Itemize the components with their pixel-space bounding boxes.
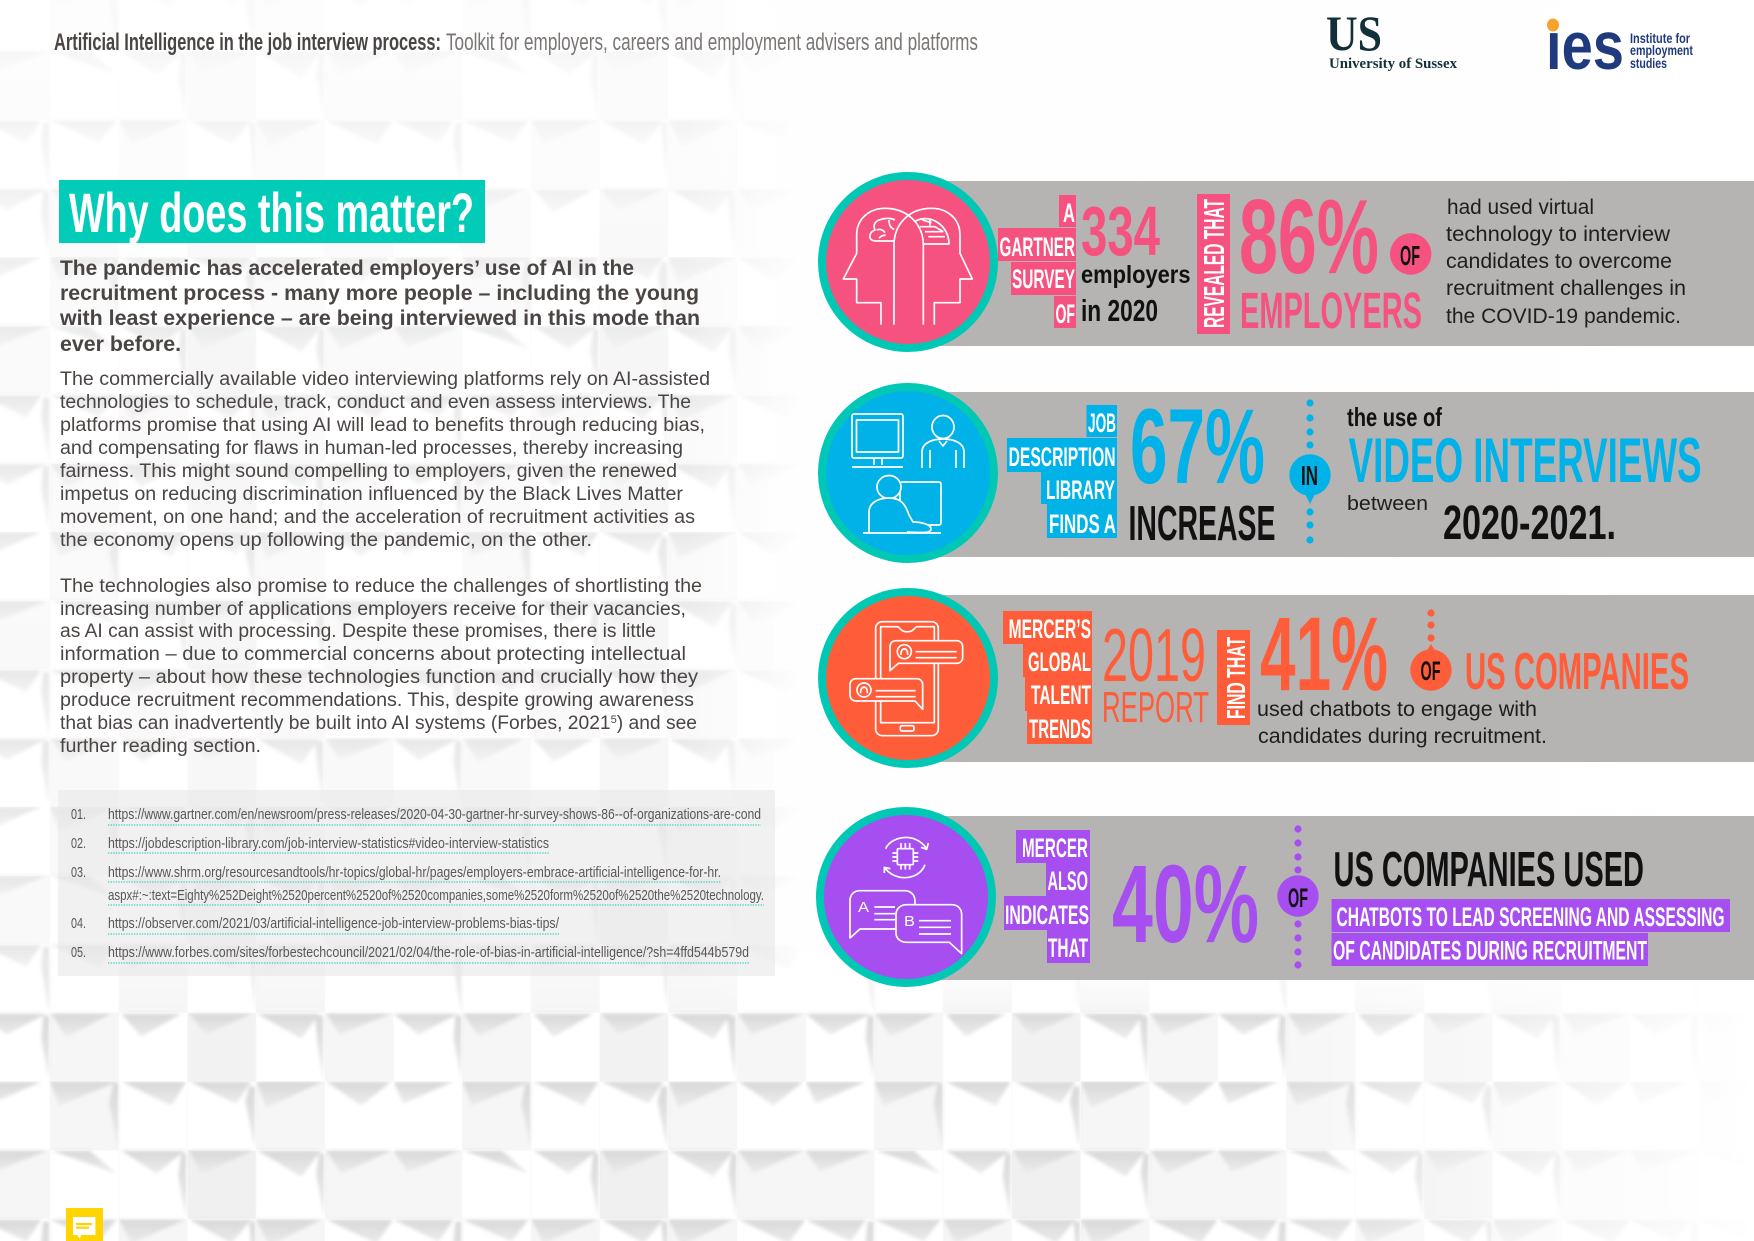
stat: 2019 report: REPORT (1102, 683, 1209, 732)
logo: Institute for Employment Studies: ies (1546, 8, 1624, 84)
text: use of video interviews (1347, 402, 1702, 550)
label boxes: A Gartner survey of: OF (1056, 299, 1075, 329)
body paragraph 1: fairness. This might sound compelling to employers, given the renewed (60, 461, 677, 482)
stat: 40%: 40% (1112, 843, 1259, 966)
text: used chatbots: used chatbots to engage with (1257, 698, 1537, 721)
panel: Mercer screening stat (820, 811, 1754, 983)
text: US companies used chatbots (1332, 843, 1730, 966)
stat: 334 employers in 2020: employers (1081, 261, 1190, 289)
dotted divider with badge: of: OF (1288, 883, 1308, 913)
icon: two heads, brain and circuit (822, 176, 994, 348)
stat: 2019 report (1102, 613, 1209, 732)
icon: video interview, monitors and people (822, 387, 994, 559)
dotted divider with badge: in (1289, 399, 1331, 544)
stat: 67% increase: 67% (1130, 386, 1265, 506)
label boxes: Job Description Library finds a: LIBRARY (1046, 475, 1115, 505)
label boxes: Mercer's Global Talent Trends: TRENDS (1029, 714, 1091, 744)
header title: Artificial Intelligence in the job interview process: (54, 29, 441, 56)
body paragraph 2: increasing number of applications employers receive for their vacancies, (60, 599, 686, 620)
body paragraph 2: as AI can assist with processing. Despite these promises, there is little (60, 621, 656, 642)
reference 01: 01. (71, 806, 86, 823)
logo: University of Sussex (1326, 5, 1457, 72)
dotted divider with badge: of: OF (1420, 656, 1440, 686)
text: virtual technology: had used virtual (1447, 196, 1594, 219)
stat: 334 employers in 2020: 334 (1081, 192, 1160, 270)
rotated label: revealed that: REVEALED THAT (1199, 199, 1231, 328)
intro bold text: recruitment process - many more people – including the young (60, 282, 699, 305)
text: used chatbots (1257, 698, 1547, 748)
dotted divider with badge: of (1410, 609, 1452, 691)
panel: Mercer talent trends stat (822, 592, 1754, 764)
text: use of video interviews: the use of (1347, 402, 1442, 432)
label boxes: Job Description Library finds a: FINDS A (1049, 509, 1116, 539)
reference 05: https://www.forbes.com/sites/forbestechcouncil/2021/02/04/the-role-of-bias-in-artificial-intelligence/?sh=4ffd544b579d (108, 944, 749, 961)
rotated label: find that (1217, 630, 1251, 725)
logo: Institute for Employment Studies: employment (1630, 42, 1693, 58)
badge: of: OF (1400, 240, 1420, 271)
body paragraph 1: technologies to schedule, track, conduct and even assess interviews. The (60, 392, 691, 413)
icon: phone with chat bubbles (822, 592, 994, 764)
panel: Gartner survey stat (822, 176, 1754, 348)
badge: of (1390, 233, 1431, 275)
panel: Job Description Library stat (822, 386, 1754, 559)
reference 01: https://www.gartner.com/en/newsroom/press-releases/2020-04-30-gartner-hr-survey-shows-86--of-organizations-are-cond (108, 806, 761, 823)
body paragraph 2: ) and see (617, 713, 697, 734)
label boxes: Mercer's Global Talent Trends (1003, 611, 1092, 744)
intro bold text: ever before. (60, 333, 181, 356)
header title: Toolkit for employers, careers and employment advisers and platforms (446, 29, 978, 56)
rotated label: revealed that (1197, 194, 1231, 334)
intro bold text (59, 257, 700, 356)
heading: Why does this matter? (59, 180, 485, 244)
body paragraph 1: and compensating for flaws in human-led processes, thereby increasing (60, 438, 683, 459)
reference 03: aspx#:~:text=Eighty%252Deight%2520percent%2520of%2520companies,some%2520form%2520of%2520the%2520technology. (108, 887, 764, 904)
label boxes: A Gartner survey of (998, 195, 1076, 329)
logo: Institute for Employment Studies (1544, 8, 1693, 84)
body paragraph 2: that bias can inadvertently be built into AI systems (Forbes, 2021 (60, 713, 604, 734)
label boxes: Mercer also indicates that: ALSO (1048, 866, 1088, 896)
icon: yellow comment tab (66, 1208, 103, 1241)
body paragraph 1 (60, 369, 710, 551)
reference 02: 02. (71, 835, 86, 852)
reference 05: 05. (71, 944, 86, 961)
body paragraph 2: The technologies also promise to reduce the challenges of shortlisting the (60, 576, 702, 597)
body paragraph 2 (60, 576, 702, 757)
icon: chip and A/B chat bubbles (820, 811, 992, 983)
header title (54, 29, 978, 56)
label boxes: A Gartner survey of: A (1063, 198, 1075, 228)
label boxes: Mercer's Global Talent Trends: TALENT (1031, 680, 1091, 710)
text: use of video interviews: between (1347, 493, 1428, 515)
icon: chip and A/B chat bubbles: B (904, 913, 915, 930)
label boxes: A Gartner survey of: GARTNER (1000, 232, 1075, 262)
panel: references (58, 790, 775, 976)
body paragraph 2: information – due to commercial concerns about protecting intellectual (60, 644, 686, 665)
reference 04: https://observer.com/2021/03/artificial-intelligence-job-interview-problems-bias-tips/ (108, 915, 560, 932)
stat: 67% increase (1128, 386, 1276, 551)
text: virtual technology (1446, 196, 1686, 328)
stat: 67% increase: INCREASE (1128, 497, 1276, 551)
logo: University of Sussex: US (1326, 5, 1382, 61)
text: use of video interviews: 2020-2021. (1443, 497, 1616, 550)
label boxes: Mercer also indicates that (1004, 830, 1090, 963)
reference 03 (71, 864, 764, 905)
text: virtual technology: candidates to overcome (1446, 250, 1672, 273)
text: virtual technology: technology to interview (1446, 223, 1671, 246)
body paragraph 2: produce recruitment recommendations. This, despite growing awareness (60, 690, 694, 711)
label boxes: Job Description Library finds a (1007, 405, 1117, 539)
stat: 2019 report: 2019 (1102, 613, 1206, 697)
rotated label: find that: FIND THAT (1221, 637, 1251, 719)
stat: 86% employers (1239, 178, 1422, 339)
stat: 334 employers in 2020: in 2020 (1081, 293, 1158, 328)
body paragraph 2: further reading section. (60, 736, 261, 757)
logo: Institute for Employment Studies: studies (1630, 55, 1667, 71)
label boxes: Job Description Library finds a: JOB (1088, 408, 1116, 438)
label boxes: Job Description Library finds a: DESCRIPTION (1009, 442, 1116, 472)
label boxes: Mercer also indicates that: INDICATES (1005, 900, 1089, 930)
label boxes: Mercer's Global Talent Trends: GLOBAL (1028, 647, 1091, 677)
body paragraph 1: impetus on reducing discrimination influenced by the Black Lives Matter (60, 484, 684, 505)
body paragraph 2: property – about how these technologies function and crucially how they (60, 667, 699, 688)
logo: University of Sussex: University of Sussex (1329, 56, 1457, 72)
stat: 334 employers in 2020 (1081, 192, 1190, 328)
stat: 86% employers: EMPLOYERS (1240, 282, 1422, 339)
dotted divider with badge: in: IN (1301, 460, 1318, 491)
stat: 86% employers: 86% (1239, 178, 1379, 296)
logo: Institute for Employment Studies: Institute for (1630, 30, 1690, 46)
reference 03: https://www.shrm.org/resourcesandtools/hr-topics/global-hr/pages/employers-embrace-artificial-intelligence-for-hr. (108, 864, 721, 881)
body paragraph 1: platforms promise that using AI will lead to benefits through reducing bias, (60, 415, 705, 436)
body paragraph 1: the economy opens up following the pandemic, on the other. (60, 530, 592, 551)
reference 04: 04. (71, 915, 86, 932)
text: virtual technology: the COVID-19 pandemic. (1446, 305, 1681, 328)
label boxes: Mercer also indicates that: MERCER (1022, 833, 1088, 863)
reference 02: https://jobdescription-library.com/job-interview-statistics#video-interview-statistics (108, 835, 549, 852)
reference 03: 03. (71, 864, 86, 881)
text: used chatbots: candidates during recruitment. (1258, 725, 1547, 748)
stat: 41%: 41% (1260, 596, 1388, 713)
icon: chip and A/B chat bubbles: A (858, 899, 869, 916)
body paragraph 1: The commercially available video interviewing platforms rely on AI-assisted (60, 369, 710, 390)
text: virtual technology: recruitment challenges in (1446, 277, 1686, 300)
dotted divider with badge: of (1277, 825, 1319, 969)
intro bold text: with least experience – are being interviewed in this mode than (59, 307, 700, 330)
body paragraph 1: movement, on one hand; and the acceleration of recruitment activities as (60, 507, 695, 528)
label boxes: A Gartner survey of: SURVEY (1012, 264, 1075, 294)
heading: Why does this matter?: Why does this matter? (69, 181, 474, 244)
label boxes: Mercer also indicates that: THAT (1048, 933, 1088, 963)
label boxes: Mercer's Global Talent Trends: MERCER’S (1009, 614, 1091, 644)
body paragraph 2: 5 (611, 714, 617, 726)
intro bold text: The pandemic has accelerated employers’ use of AI in the (60, 257, 634, 280)
